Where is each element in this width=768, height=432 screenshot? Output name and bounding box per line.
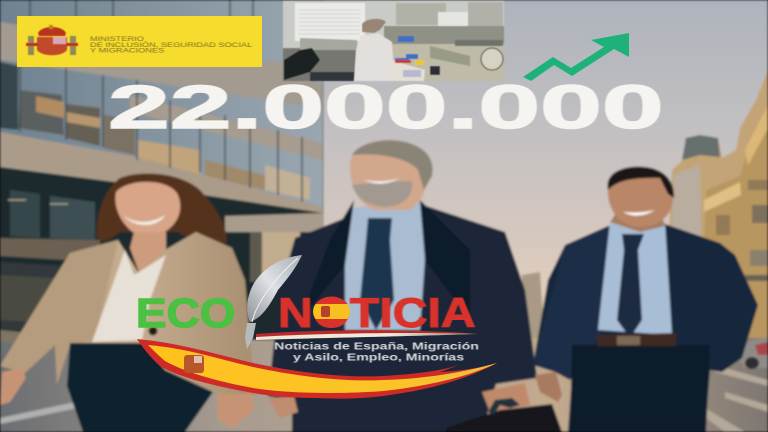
ministry logo <box>17 16 262 67</box>
ministry name: MINISTERIO <box>90 35 144 43</box>
swoosh under brand name <box>256 330 478 340</box>
brand word: NOTICIA: O <box>313 289 350 336</box>
logo: Eco Noticia <box>136 255 497 399</box>
ground <box>0 338 768 432</box>
brand word: NOTICIA: TICIA <box>350 289 476 336</box>
car <box>738 337 768 369</box>
laboratory photo inset <box>283 1 504 81</box>
briefcase <box>446 398 562 432</box>
distant street <box>522 272 545 345</box>
ground floor <box>0 167 323 340</box>
mullions <box>20 0 302 202</box>
icon: ribbon coat of arms <box>184 355 204 373</box>
arrow: rising green trend <box>523 33 629 81</box>
headline number: 22.000.000 <box>108 73 664 141</box>
woman <box>0 174 256 432</box>
icon: Spanish flag circle <box>313 296 350 322</box>
right man <box>533 167 758 432</box>
ministry name: Y MIGRACIONES <box>90 47 164 54</box>
ribbon: Spanish flag <box>137 339 497 399</box>
centre man <box>268 140 537 432</box>
tagline: Noticias de España, Migración <box>274 340 479 352</box>
brand word: NOTICIA: N <box>278 289 313 336</box>
ministry name: DE INCLUSIÓN, SEGURIDAD SOCIAL <box>90 41 253 49</box>
icon: coat of arms <box>26 25 78 55</box>
left-hand office building <box>0 0 323 348</box>
icon: feather quill <box>245 255 302 349</box>
tagline: y Asilo, Empleo, Minorías <box>293 351 464 363</box>
brand word: ECO: ECO <box>136 291 235 336</box>
right-hand city buildings <box>665 70 768 345</box>
